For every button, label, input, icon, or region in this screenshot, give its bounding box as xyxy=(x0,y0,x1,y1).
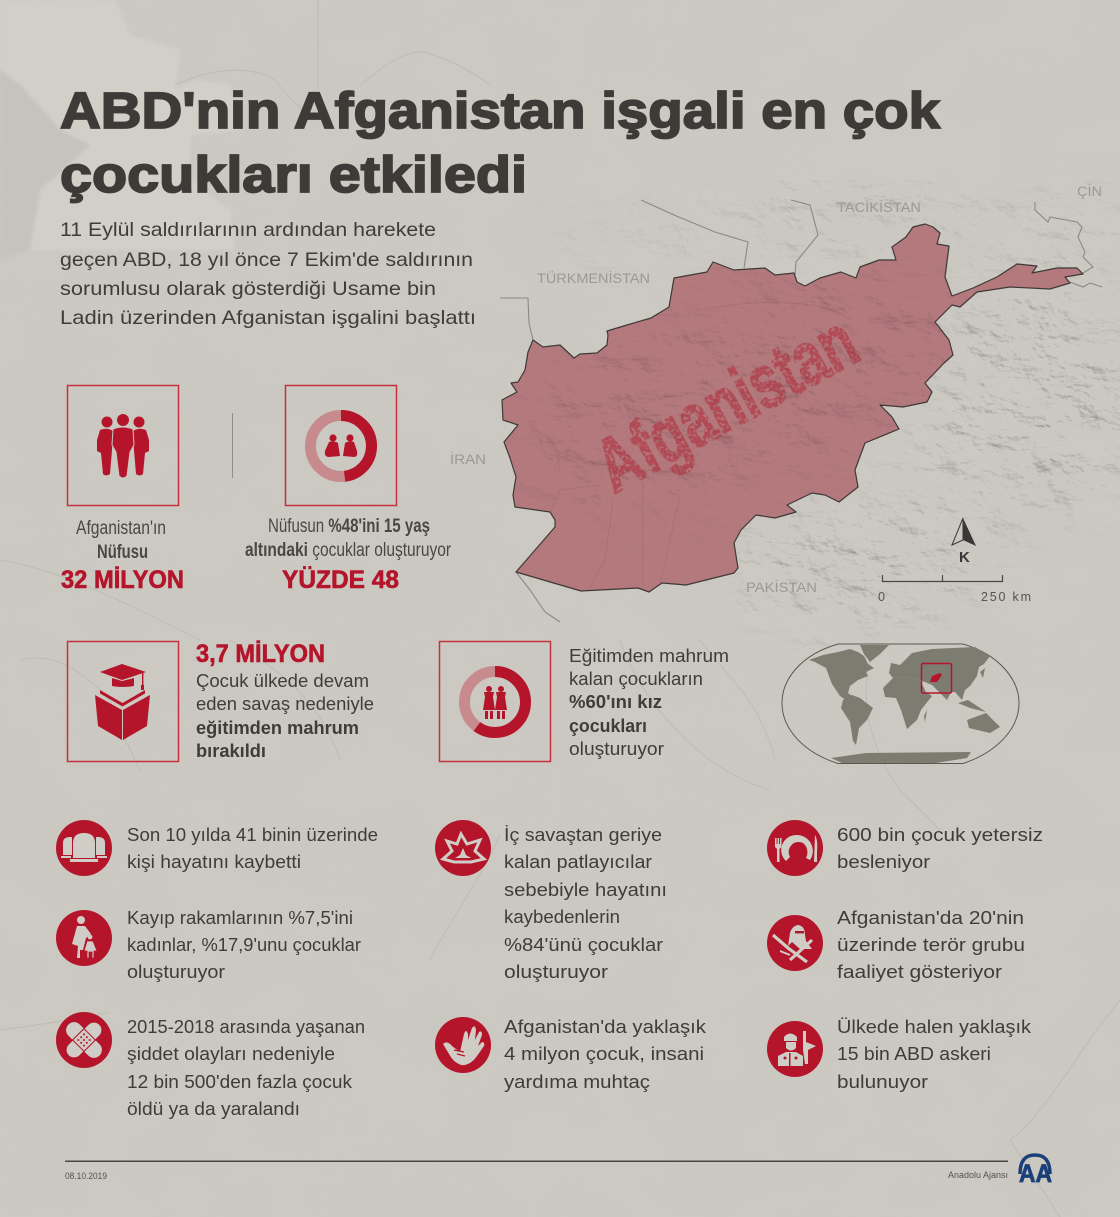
panel: education xyxy=(68,640,374,762)
text: aid: yardıma muhtaç xyxy=(504,1071,650,1092)
north arrow xyxy=(952,518,976,566)
text: casualties: oluşturuyor xyxy=(127,961,225,982)
map: Afghanistan xyxy=(500,220,1083,600)
share label: YÜZDE 48 xyxy=(282,565,399,594)
text: nutrition: 600 bin çocuk yetersiz xyxy=(837,824,1043,845)
icon: militant xyxy=(767,915,823,971)
country labels: ÇİN xyxy=(1077,182,1102,199)
text: violence: şiddet olayları nedeniyle xyxy=(127,1043,335,1064)
panel: under 15 share xyxy=(245,386,452,594)
text: nutrition: besleniyor xyxy=(837,851,930,872)
title xyxy=(60,82,941,203)
box with book icon xyxy=(68,642,178,762)
text: explosives: kaybedenlerin xyxy=(504,906,620,927)
footer xyxy=(65,1155,1052,1188)
intro text: geçen ABD, 18 yıl önce 7 Ekim'de saldırının xyxy=(60,249,473,271)
icon: bandage xyxy=(53,1009,115,1071)
text: explosives: %84'ünü çocuklar xyxy=(504,934,663,955)
icon: helping hands xyxy=(435,1017,491,1073)
population label xyxy=(61,518,184,594)
box with donut 48 percent xyxy=(286,386,396,506)
education text: bırakıldı xyxy=(196,740,266,761)
text: US troops xyxy=(837,1016,1032,1092)
share label: Nüfusun %48'ini 15 yaş xyxy=(268,516,430,537)
icon: woman and child xyxy=(56,910,112,966)
text: terror groups: Afganistan'da 20'nin xyxy=(837,907,1024,928)
country labels: TÜRKMENİSTAN xyxy=(537,269,650,286)
education text: Çocuk ülkede devam xyxy=(196,670,369,691)
footer: Anadolu Ajansı xyxy=(948,1170,1008,1180)
country borders xyxy=(500,200,1102,622)
bullet column right xyxy=(767,820,1043,1092)
text: terror groups: faaliyet gösteriyor xyxy=(837,961,1002,982)
text: aid: Afganistan'da yaklaşık xyxy=(504,1016,707,1037)
map stamp: Afganistan: Afganistan xyxy=(581,298,871,509)
text: explosives: sebebiyle hayatını xyxy=(504,879,667,900)
box with people icon xyxy=(68,386,178,506)
text: aid: 4 milyon çocuk, insani xyxy=(504,1043,704,1064)
panel: population xyxy=(61,386,184,594)
text: explosives: kalan patlayıcılar xyxy=(504,851,652,872)
icon: soldier xyxy=(767,1021,823,1077)
title: çocukları etkiledi xyxy=(60,146,527,203)
text: deaths: Son 10 yılda 41 binin üzerinde xyxy=(127,824,378,845)
girls text: çocukları xyxy=(569,715,647,736)
text: explosives: İç savaştan geriye xyxy=(504,824,662,845)
text: casualties: Kayıp rakamlarının %7,5'ini xyxy=(127,907,353,928)
text: US troops: 15 bin ABD askeri xyxy=(837,1043,991,1064)
bullet column left xyxy=(53,820,378,1119)
country labels: TACİKİSTAN xyxy=(837,198,921,215)
population label: 32 MİLYON xyxy=(61,566,184,594)
share label xyxy=(245,516,452,594)
scale bar xyxy=(878,575,1031,604)
girls text: oluşturuyor xyxy=(569,738,664,759)
girls text: %60'ını kız xyxy=(569,691,662,712)
text: US troops: Ülkede halen yaklaşık xyxy=(837,1016,1032,1037)
text: casualties xyxy=(127,907,361,982)
logo: AA: AA xyxy=(1019,1160,1052,1188)
text: violence: öldü ya da yaralandı xyxy=(127,1098,300,1119)
intro text: sorumlusu olarak gösterdiği Usame bin xyxy=(60,278,436,300)
girls text xyxy=(569,645,729,759)
terrain hillshade xyxy=(628,180,1120,646)
text: deaths: kişi hayatını kaybetti xyxy=(127,851,301,872)
text: casualties: kadınlar, %17,9'unu çocuklar xyxy=(127,934,361,955)
population label: Afganistan'ın xyxy=(76,518,166,539)
country labels: PAKİSTAN xyxy=(746,578,817,595)
population label: Nüfusu xyxy=(97,542,148,563)
bullet column middle xyxy=(435,820,707,1092)
share label: altındaki çocuklar oluşturuyor xyxy=(245,540,452,561)
title: ABD'nin Afganistan işgali en çok xyxy=(60,82,941,139)
text: violence: 12 bin 500'den fazla çocuk xyxy=(127,1071,353,1092)
text: nutrition xyxy=(837,824,1043,872)
text: US troops: bulunuyor xyxy=(837,1071,928,1092)
text: terror groups xyxy=(837,907,1025,982)
girls text: kalan çocukların xyxy=(569,668,703,689)
panel: girls xyxy=(440,642,729,762)
education text xyxy=(196,640,374,761)
divider xyxy=(232,413,233,478)
text: violence xyxy=(127,1016,365,1119)
box with donut 60 percent xyxy=(440,642,550,762)
text: explosives xyxy=(504,824,667,982)
country labels: İRAN xyxy=(450,450,486,467)
intro text: 11 Eylül saldırılarının ardından harekete xyxy=(60,219,436,241)
locator world map xyxy=(782,644,1019,764)
icon: explosion xyxy=(435,820,491,876)
country labels xyxy=(450,182,1102,595)
text: deaths xyxy=(127,824,378,872)
icon: graves xyxy=(56,820,112,876)
scale bar: 250 km xyxy=(981,590,1031,604)
icon: plate and cutlery xyxy=(767,820,823,876)
education text: eğitimden mahrum xyxy=(196,717,359,738)
footer: 08.10.2019 xyxy=(65,1171,107,1182)
scale bar: 0 xyxy=(878,590,885,604)
text: terror groups: üzerinde terör grubu xyxy=(837,934,1025,955)
north arrow: K xyxy=(959,549,970,566)
girls text: Eğitimden mahrum xyxy=(569,645,729,666)
text: violence: 2015-2018 arasında yaşanan xyxy=(127,1016,365,1037)
text: aid xyxy=(504,1016,707,1092)
education text: eden savaş nedeniyle xyxy=(196,693,374,714)
intro text: Ladin üzerinden Afganistan işgalini başlattı xyxy=(60,307,476,329)
education text: 3,7 MİLYON xyxy=(196,640,325,668)
text: explosives: oluşturuyor xyxy=(504,961,608,982)
intro text xyxy=(60,219,476,329)
